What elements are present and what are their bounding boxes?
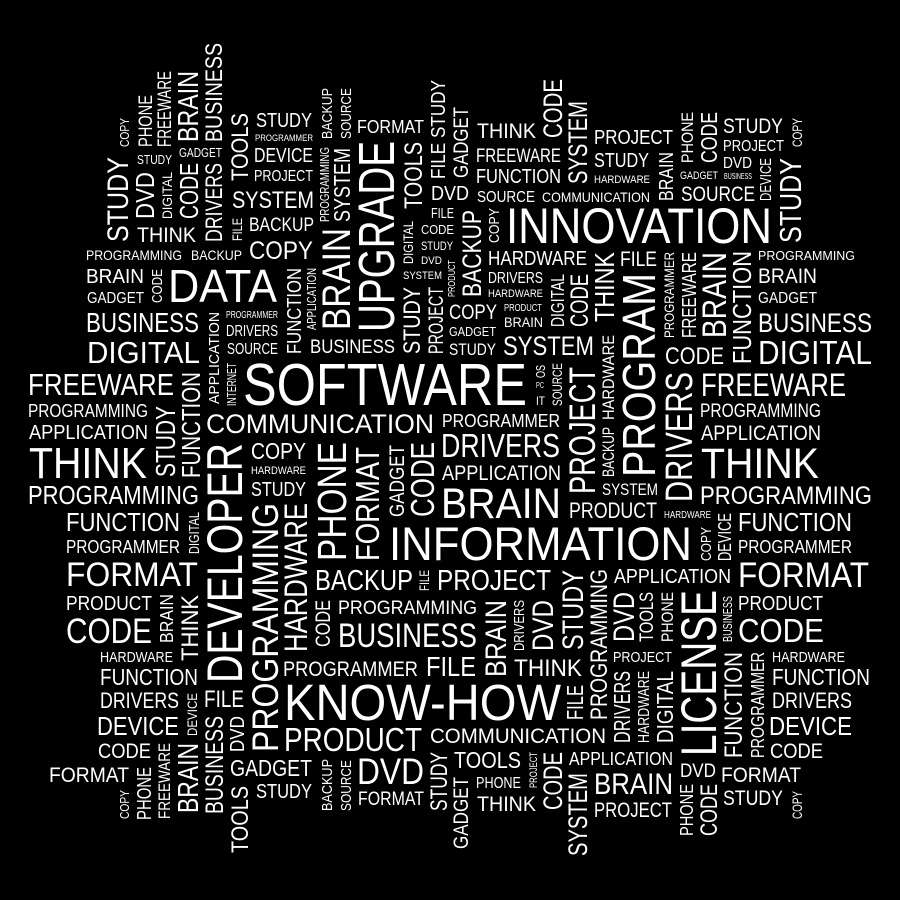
bottom right words: DRIVERS	[772, 688, 852, 713]
bottom left words: PHONE	[134, 767, 156, 820]
middle left words: HARDWARE	[251, 465, 306, 477]
bottom centre words: PROJECT	[594, 799, 672, 822]
middle left words: COPY	[251, 438, 306, 464]
word: UPGRADE: UPGRADE	[348, 141, 405, 332]
centre words: SOURCE	[549, 363, 565, 406]
middle left words: PROGRAMMING	[28, 401, 148, 421]
bottom right words: CODE	[770, 740, 823, 763]
bottom centre words: FILE	[562, 685, 588, 720]
bottom left words: DEVICE	[184, 693, 200, 736]
top right words: PROJECT	[723, 138, 784, 155]
centre words: GADGET	[386, 445, 409, 517]
top right words: DEVICE	[758, 158, 775, 201]
top left words: GADGET	[87, 290, 144, 307]
bottom centre words: GADGET	[450, 777, 473, 849]
top left words: STUDY	[137, 152, 172, 167]
bottom centre words: APPLICATION	[569, 749, 673, 769]
middle right words: DVD	[608, 592, 641, 642]
middle right words: PROGRAMMING	[700, 401, 821, 422]
top left words: BACKUP	[191, 247, 242, 263]
centre words: DRIVERS	[441, 427, 560, 464]
middle right words: PRODUCT	[738, 593, 823, 615]
bottom centre words: STUDY	[557, 570, 590, 650]
centre words: HARDWARE	[599, 335, 618, 420]
middle left words: PROGRAMMING	[28, 480, 199, 510]
top centre words: PROJECT	[425, 287, 448, 354]
top centre words: DIGITAL	[548, 274, 568, 327]
bottom left words: FORMAT	[358, 789, 424, 810]
bottom right words: CODE	[696, 784, 723, 836]
top left words: BUSINESS	[201, 43, 228, 142]
top right words: SOURCE	[681, 183, 755, 206]
centre words: PROJECT	[437, 565, 551, 597]
top centre words: STUDY	[449, 340, 496, 359]
top right words: BUSINESS	[758, 308, 872, 338]
bottom left words: GADGET	[230, 755, 312, 781]
bottom centre words: FILE	[426, 651, 476, 682]
top right words: PROGRAMMER	[661, 252, 677, 338]
top left words: STUDY	[102, 157, 135, 242]
top left words: PROJECT	[254, 168, 313, 185]
top centre words: STUDY	[421, 239, 453, 253]
bottom right words: STUDY	[723, 787, 783, 810]
middle left words: DIGITAL	[186, 512, 203, 554]
centre words: OS	[533, 365, 548, 378]
centre words: FILE	[416, 570, 432, 591]
top right words: CODE	[665, 343, 724, 370]
middle left words: CODE	[66, 612, 152, 651]
bottom right words: DRIVERS	[609, 671, 635, 743]
middle left words: BRAIN	[157, 594, 177, 643]
top centre words: FUNCTION	[476, 166, 561, 188]
top centre words: SOURCE	[477, 189, 535, 206]
bottom right words	[609, 649, 870, 836]
middle right words: APPLICATION	[701, 422, 821, 445]
middle left words: HARDWARE	[278, 503, 314, 652]
top centre words: HARDWARE	[594, 174, 650, 186]
top left words: DEVICE	[254, 145, 313, 167]
top left words: SYSTEM	[232, 187, 314, 214]
top left words: SOURCE	[227, 341, 278, 358]
middle right words	[608, 367, 872, 649]
top right words: PHONE	[678, 112, 697, 163]
top centre words: STUDY	[594, 150, 649, 172]
top right words: COPY	[789, 118, 805, 147]
top centre words: FILE	[431, 205, 454, 222]
bottom left words: COPY	[117, 790, 132, 819]
top centre words: DIGITAL	[400, 221, 416, 264]
centre words: PHONE	[309, 442, 355, 561]
bottom centre words: BRAIN	[594, 768, 673, 801]
centre words: DRIVERS	[659, 372, 701, 502]
bottom left words: SOURCE	[338, 760, 355, 811]
middle left words: COMMUNICATION	[206, 409, 434, 439]
top left words: GADGET	[179, 145, 222, 160]
word: KNOW-HOW: KNOW-HOW	[284, 674, 561, 731]
middle right words: BUSINESS	[720, 596, 735, 642]
middle right words: FUNCTION	[738, 507, 852, 537]
bottom left words: CODE	[312, 600, 335, 647]
top right words: STUDY	[723, 115, 783, 138]
bottom left words: BACKUP	[319, 759, 336, 811]
middle left words: STUDY	[150, 406, 181, 477]
top centre words: COMMUNICATION	[542, 189, 650, 205]
bottom right words: PROJECT	[613, 649, 672, 666]
top centre words: GADGET	[449, 324, 496, 339]
top left words: DVD	[130, 172, 160, 219]
top left words: PHONE	[136, 95, 157, 147]
bottom right words: HARDWARE	[772, 649, 845, 666]
top centre words: CODE	[538, 79, 568, 138]
bottom left words: PRODUCT	[284, 721, 422, 758]
top centre words: HARDWARE	[488, 248, 587, 270]
middle left words: INTERNET	[224, 363, 239, 406]
word: LICENSE: LICENSE	[671, 590, 727, 756]
bottom right words: DVD	[680, 761, 716, 782]
bottom centre words: TOOLS	[454, 747, 521, 773]
word: DATA: DATA	[168, 260, 277, 312]
bottom left words: DEVICE	[97, 711, 179, 741]
centre words: CODE	[404, 442, 441, 517]
centre words: IT	[536, 394, 546, 408]
word: INNOVATION: INNOVATION	[506, 198, 772, 254]
top centre words: PRODUCT	[504, 303, 542, 314]
word: PROGRAMMING vertical: PROGRAMMING	[245, 503, 286, 752]
centre words: SYSTEM	[602, 480, 658, 499]
bottom centre words: THINK	[477, 793, 536, 816]
centre words: HARDWARE	[664, 510, 711, 521]
top centre words: DRIVERS	[488, 270, 543, 287]
top centre words: SYSTEM	[503, 331, 594, 361]
top right words: BRAIN	[758, 265, 817, 288]
top left words	[86, 43, 424, 404]
middle right words: COPY	[698, 527, 715, 561]
bottom centre words: STUDY	[426, 752, 453, 811]
bottom right words: COPY	[789, 791, 805, 819]
bottom right words: FUNCTION	[772, 664, 870, 690]
top right words: PROGRAMMING	[758, 248, 855, 263]
word: PROGRAM: PROGRAM	[613, 273, 665, 477]
top centre words: COPY	[486, 208, 503, 243]
top left words: STUDY	[256, 110, 312, 132]
bottom left words: DVD	[227, 716, 249, 752]
bottom centre words: PROJECT	[528, 752, 540, 788]
top right words: DIGITAL	[758, 334, 872, 371]
middle left words: PRODUCT	[66, 593, 152, 615]
top left words: FREEWARE	[155, 71, 176, 147]
middle right words: FREEWARE	[701, 367, 846, 403]
top right words: BUSINESS	[724, 172, 752, 181]
bottom left words: PROGRAMMER	[283, 658, 418, 681]
top left words: SOURCE	[338, 88, 355, 139]
top left words: THINK	[137, 224, 196, 247]
top centre words: SYSTEM	[563, 101, 593, 184]
top centre words: TOOLS	[400, 142, 428, 209]
top left words: FILE	[229, 218, 245, 241]
top centre words: BRAIN	[504, 314, 543, 330]
top left words: BUSINESS	[86, 307, 199, 338]
top centre words: COPY	[449, 301, 497, 324]
centre words	[309, 335, 711, 597]
top centre words: DVD	[421, 255, 442, 267]
middle right words: CODE	[738, 612, 824, 649]
middle left words: FORMAT	[66, 556, 198, 594]
top centre words: DVD	[431, 183, 469, 205]
bottom left words: FREEWARE	[155, 743, 174, 819]
top centre words: SYSTEM	[403, 270, 442, 282]
bottom left words	[49, 600, 424, 853]
bottom right words: PROGRAMMER	[748, 652, 768, 758]
middle left words: FREEWARE	[28, 367, 174, 402]
top left words: BRAIN	[173, 71, 205, 142]
bottom centre words: BUSINESS	[338, 617, 477, 655]
bottom centre words: COMMUNICATION	[430, 725, 606, 748]
top centre words	[399, 79, 673, 361]
bottom left words: CODE	[98, 740, 151, 763]
top centre words: CODE	[421, 222, 454, 237]
word: DEVELOPER: DEVELOPER	[197, 443, 253, 683]
top right words: GADGET	[758, 290, 817, 307]
word: INFORMATION: INFORMATION	[389, 517, 692, 570]
bottom left words: TOOLS	[227, 786, 254, 853]
top left words: DIGITAL	[159, 172, 175, 219]
bottom left words: HARDWARE	[100, 649, 173, 666]
bottom left words: BRAIN	[173, 743, 205, 813]
bottom centre words: DRIVERS	[511, 600, 528, 651]
top right words: FILE	[620, 248, 657, 271]
headline words	[168, 141, 772, 756]
bottom right words: DIGITAL	[652, 671, 678, 743]
word: SOFTWARE: SOFTWARE	[243, 352, 527, 418]
bottom left words: DRIVERS	[100, 688, 179, 713]
top left words: BRAIN	[86, 266, 144, 288]
top centre words: CODE	[566, 274, 594, 327]
top left words: FUNCTION	[284, 268, 306, 354]
middle right words: PHONE	[658, 592, 677, 642]
middle right words: PROGRAMMING	[700, 482, 872, 510]
top centre words: THINK	[589, 252, 620, 322]
middle right words: DEVICE	[715, 513, 735, 561]
centre words: BACKUP	[599, 427, 618, 477]
middle left words: FUNCTION	[66, 507, 180, 537]
top centre words: PROJECT	[594, 127, 673, 149]
bottom centre words	[338, 569, 673, 856]
centre words: BACKUP	[315, 565, 413, 597]
middle right words: FORMAT	[738, 556, 869, 595]
bottom centre words: PROGRAMMING	[338, 598, 477, 619]
bottom centre words: SYSTEM	[563, 773, 593, 856]
top left words: DRIVERS	[201, 163, 228, 242]
top right words: BRAIN	[656, 152, 678, 201]
bottom right words: HARDWARE	[636, 671, 653, 743]
middle left words: APPLICATION	[29, 422, 148, 444]
top left words: FORMAT	[357, 117, 424, 137]
top centre words: HARDWARE	[488, 288, 543, 300]
centre words: PRODUCT	[569, 498, 657, 523]
top right words: CODE	[696, 112, 722, 163]
middle left words: STUDY	[251, 479, 306, 501]
top left words: DIGITAL	[87, 335, 200, 370]
top left words: SYSTEM	[329, 148, 355, 222]
bottom left words: FUNCTION	[100, 664, 198, 690]
top centre words: THINK	[477, 120, 536, 143]
bottom right words: FUNCTION	[720, 652, 748, 758]
middle right words: PROGRAMMER	[738, 537, 852, 557]
top left words: PROGRAMMING	[317, 147, 332, 222]
middle left words: FUNCTION	[176, 372, 206, 478]
top left words: PROGRAMMER	[226, 310, 278, 321]
bottom centre words: PROGRAMMING	[586, 569, 613, 720]
top right words: FREEWARE	[679, 252, 701, 338]
top centre words: PRODUCT	[447, 260, 458, 297]
bottom left words: DVD	[357, 751, 424, 792]
top centre words: FILE STUDY	[428, 80, 450, 179]
centre words: PROGRAMMER	[442, 411, 560, 431]
top centre words: GADGET	[450, 107, 473, 178]
centre words: APPLICATION	[442, 462, 561, 485]
middle left words: THINK	[177, 595, 204, 661]
top centre words: FREEWARE	[476, 146, 561, 167]
top left words: PROGRAMMING	[86, 247, 182, 263]
bottom centre words: THINK	[514, 655, 582, 682]
top left words: BACKUP	[319, 88, 336, 139]
bottom centre words: BRAIN	[480, 600, 513, 677]
top left words: PROGRAMMER	[255, 133, 313, 143]
top centre words: STUDY	[399, 287, 426, 354]
top left words: COPY	[249, 237, 313, 265]
top left words: BACKUP	[249, 215, 314, 236]
bottom right words: DEVICE	[769, 711, 852, 741]
top left words: CODE	[174, 163, 204, 219]
top right words: BRAIN	[696, 252, 734, 338]
top left words: TOOLS	[227, 113, 254, 181]
top left words: COPY	[117, 118, 132, 147]
middle right words: TOOLS	[637, 592, 658, 642]
top left words: CODE	[149, 269, 166, 303]
top centre words: BACKUP	[457, 210, 487, 297]
middle right words: APPLICATION	[614, 566, 731, 588]
bottom centre words: DVD	[527, 600, 560, 651]
top left words: APPLICATION	[206, 312, 223, 404]
bottom right words: FORMAT	[721, 764, 801, 787]
bottom left words: FORMAT	[49, 764, 129, 787]
top left words: DRIVERS	[226, 323, 278, 340]
bottom left words: FILE	[204, 686, 244, 713]
bottom centre words: CODE	[538, 752, 568, 810]
centre words: FORMAT	[349, 447, 386, 561]
middle left words: PROGRAMMER	[66, 537, 180, 557]
top left words: BRAIN	[315, 228, 359, 330]
centre words: PROJECT	[562, 367, 603, 494]
bottom left words: BUSINESS	[201, 716, 229, 814]
top right words	[620, 112, 872, 371]
word: BRAIN centre: BRAIN	[441, 480, 561, 528]
top right words: DVD	[723, 155, 752, 172]
bottom left words: STUDY	[256, 781, 312, 803]
centre words: PC	[536, 381, 544, 390]
top right words: FUNCTION	[727, 251, 757, 364]
bottom right words: PHONE	[677, 784, 697, 836]
top left words: BUSINESS	[310, 337, 395, 358]
top left words: APPLICATION	[304, 268, 319, 330]
bottom centre words: PHONE	[476, 775, 521, 792]
middle right words: THINK	[701, 440, 819, 488]
top right words: GADGET	[680, 170, 718, 182]
middle left words: THINK	[29, 439, 147, 488]
top right words: STUDY	[773, 158, 808, 243]
middle left words	[28, 363, 434, 661]
